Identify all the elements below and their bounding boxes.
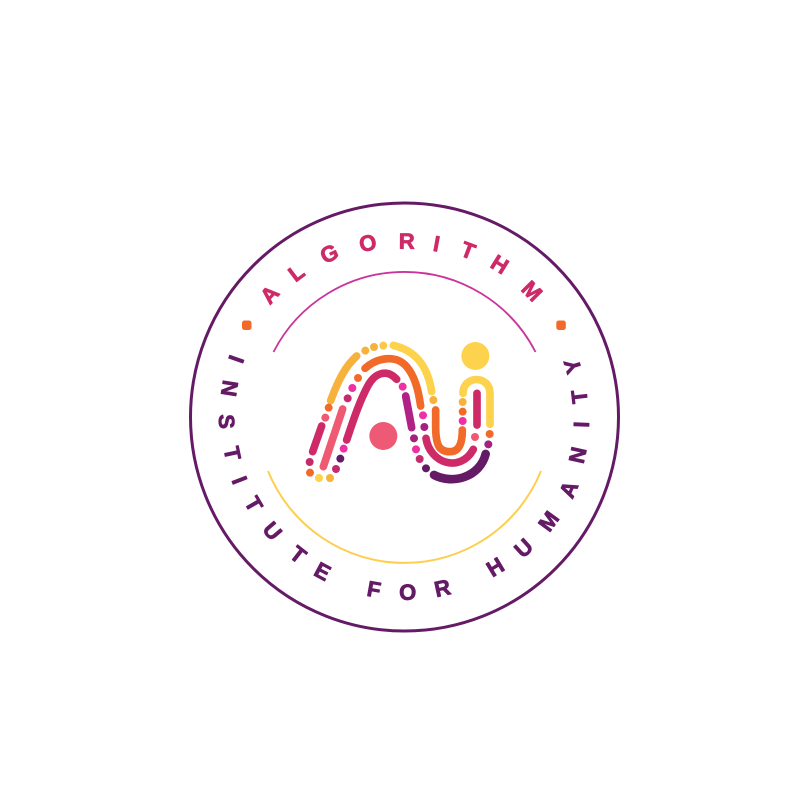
- subheading: INSTITUTE FOR HUMANITY: I: [223, 352, 249, 366]
- subheading: INSTITUTE FOR HUMANITY: Y: [559, 355, 587, 377]
- outer ring: [190, 203, 618, 631]
- small coloured dots: [306, 342, 494, 482]
- heading: ALGORITHM: T: [457, 236, 479, 265]
- subheading: INSTITUTE FOR HUMANITY: F: [365, 576, 383, 603]
- lower yellow arc: [268, 471, 541, 563]
- subheading: INSTITUTE FOR HUMANITY: A: [554, 477, 583, 502]
- subheading: INSTITUTE FOR HUMANITY: O: [399, 580, 416, 605]
- A outer yellow stroke: [393, 345, 432, 392]
- heading: ALGORITHM: G: [316, 239, 342, 269]
- heading: ALGORITHM: M: [517, 276, 547, 306]
- heading: ALGORITHM: H: [486, 250, 513, 279]
- subheading: INSTITUTE FOR HUMANITY: U: [509, 533, 538, 563]
- subheading: INSTITUTE FOR HUMANITY: I: [227, 473, 252, 487]
- heading: ALGORITHM: L: [283, 259, 309, 287]
- i inner crimson bar: [465, 393, 488, 425]
- subheading: INSTITUTE FOR HUMANITY: N: [564, 445, 592, 466]
- heading: ALGORITHM: A: [255, 280, 284, 309]
- icon: dotted AI rainbow mark: [306, 342, 494, 482]
- crimson U stroke: [426, 438, 473, 463]
- subheading: INSTITUTE FOR HUMANITY: [214, 352, 594, 605]
- heading: ALGORITHM: I: [431, 231, 442, 257]
- A left crimson bar: [313, 426, 322, 452]
- A outer amber stroke: [331, 356, 357, 401]
- subheading: INSTITUTE FOR HUMANITY: E: [310, 557, 335, 586]
- orange U stroke: [436, 410, 462, 452]
- subheading: INSTITUTE FOR HUMANITY: N: [216, 379, 243, 398]
- left orange square bullet: [242, 320, 252, 330]
- heading: ALGORITHM: [255, 229, 547, 309]
- upper pink arc: [274, 272, 536, 352]
- A middle orange stroke: [365, 359, 421, 406]
- A inner crimson stroke: [347, 373, 397, 440]
- subheading: INSTITUTE FOR HUMANITY: H: [482, 552, 509, 582]
- subheading: INSTITUTE FOR HUMANITY: T: [239, 492, 268, 517]
- subheading: INSTITUTE FOR HUMANITY: T: [566, 388, 593, 405]
- right orange square bullet: [556, 320, 566, 330]
- subheading: INSTITUTE FOR HUMANITY: R: [432, 574, 453, 602]
- subheading: INSTITUTE FOR HUMANITY: U: [258, 517, 287, 545]
- heading: ALGORITHM: O: [357, 229, 379, 257]
- subheading: INSTITUTE FOR HUMANITY: S: [214, 414, 239, 429]
- heading: ALGORITHM: R: [399, 229, 415, 254]
- subheading: INSTITUTE FOR HUMANITY: M: [533, 507, 564, 536]
- subheading: INSTITUTE FOR HUMANITY: T: [285, 541, 311, 569]
- subheading: INSTITUTE FOR HUMANITY: T: [219, 444, 246, 463]
- i body yellow stroke: [463, 380, 490, 424]
- A right magenta bar: [406, 396, 412, 428]
- i yellow head dot: [461, 342, 489, 370]
- A centre salmon dot: [369, 422, 397, 450]
- A left salmon bar: [323, 409, 343, 467]
- subheading: INSTITUTE FOR HUMANITY: I: [569, 421, 594, 428]
- purple U stroke: [434, 454, 486, 479]
